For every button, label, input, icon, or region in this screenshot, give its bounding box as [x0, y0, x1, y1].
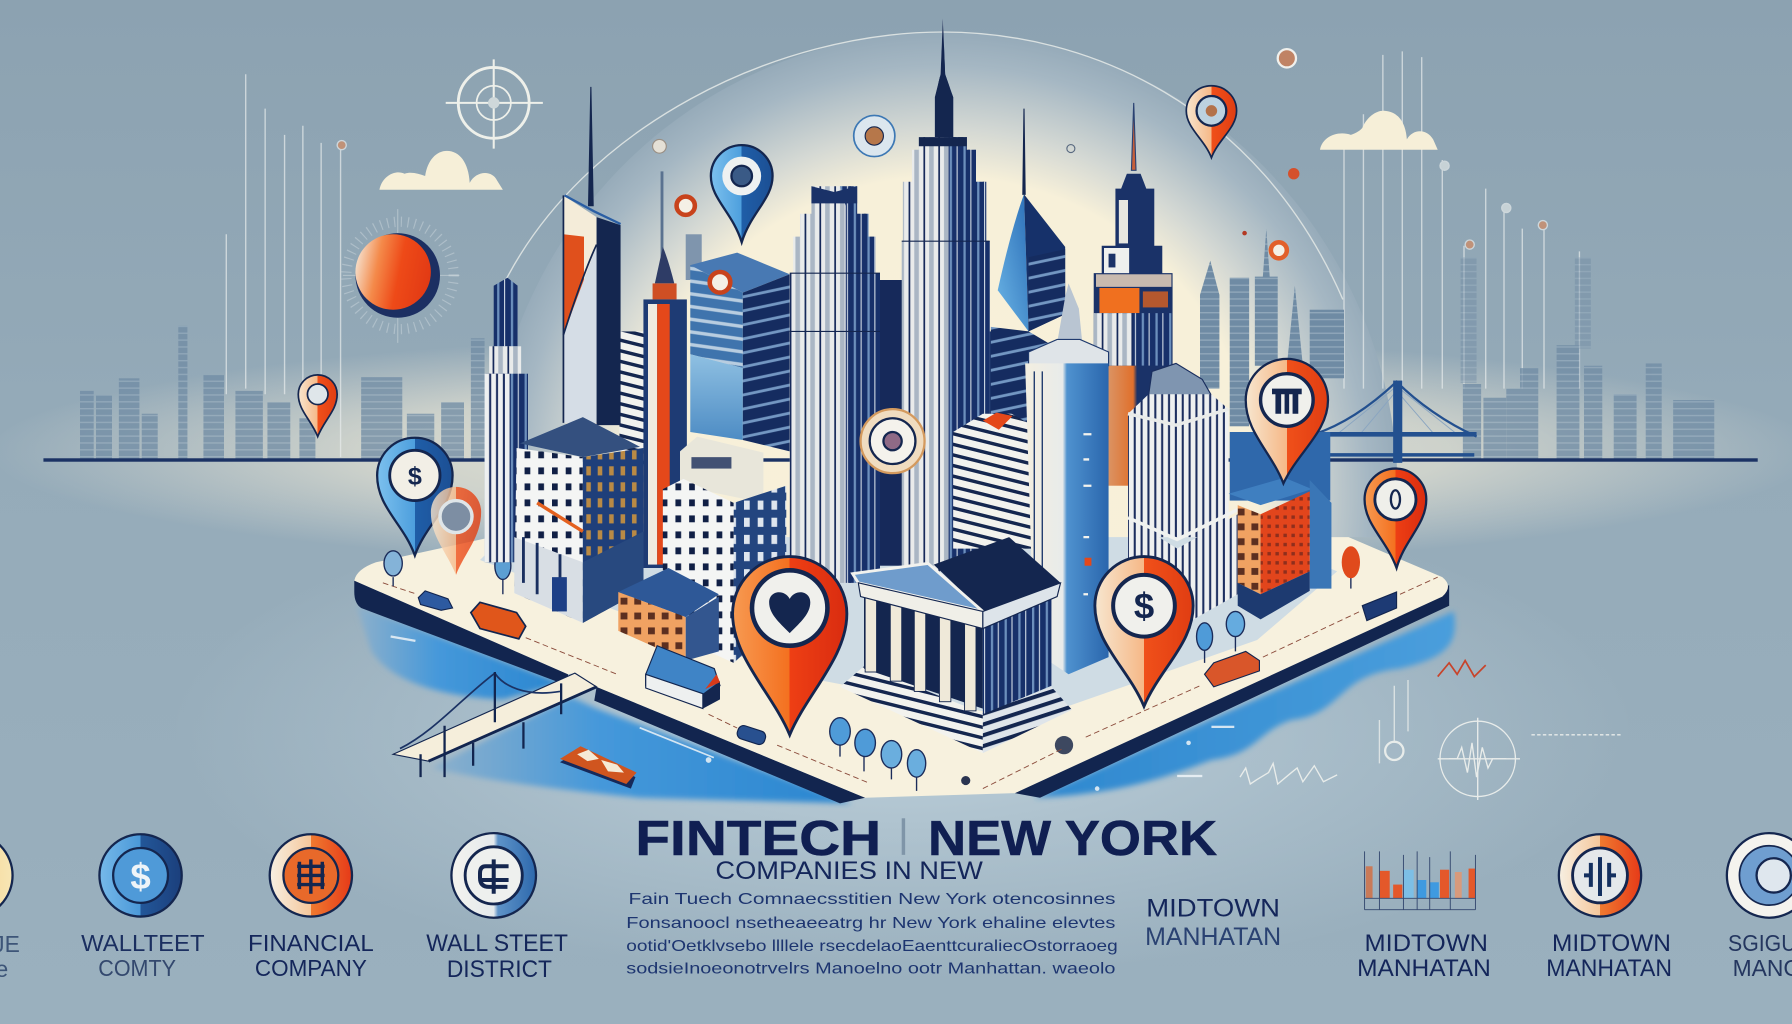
small blue house: [646, 646, 720, 709]
pier and left bridge: [393, 672, 597, 777]
tower: central spire: [902, 18, 990, 571]
label: midtown manhattan 1: [1357, 930, 1491, 982]
horizon line: [43, 458, 1758, 462]
pin: dollar: [1095, 557, 1193, 706]
tower: slim left: [485, 278, 528, 562]
midtown label centre: MANHATAN: [1145, 923, 1281, 951]
haze band at horizon: [0, 331, 1792, 983]
label: wall street district: [426, 930, 568, 983]
icon: wall street district: [451, 833, 536, 918]
pin: right small: [1365, 469, 1426, 568]
building: white grid front: [663, 437, 786, 663]
cars: [418, 591, 1397, 785]
label: partial left: [0, 931, 20, 982]
paragraph: ootid'Oetklvsebo llllele rsecdelaoEaenttcuraliecOstorraoeg: [626, 938, 1118, 955]
pin: faded behind: [431, 487, 481, 575]
cloud left: [379, 151, 503, 190]
label: financial company: [248, 930, 374, 981]
subtitle: COMPANIES IN NEW: [715, 857, 983, 885]
midtown label centre: [1145, 895, 1281, 951]
label: financial company: COMPANY: [255, 955, 367, 981]
pin: small orange left: [298, 375, 337, 437]
label: partial right: [1728, 930, 1792, 981]
paragraph: sodsieInoeonotrvelrs Manoelno ootr Manhattan. waeolo: [626, 961, 1116, 978]
tower: blue tall: [1025, 283, 1109, 674]
label: midtown manhattan 2: [1546, 930, 1672, 982]
distant skyline right: [1461, 257, 1714, 459]
temple: [840, 537, 1072, 753]
pin: heart: [733, 557, 847, 735]
label: wallteet comty: COMTY: [98, 955, 176, 981]
eye badge centre: [861, 409, 925, 473]
water glints: [390, 635, 1347, 791]
pin: blue dollar: [377, 438, 453, 555]
label: midtown manhattan 1: MANHATAN: [1357, 955, 1491, 982]
platform slab: [354, 581, 1449, 803]
label: financial company: FINANCIAL: [248, 930, 374, 956]
building: striped white: [953, 413, 1032, 549]
label: wall street district: DISTRICT: [447, 956, 552, 983]
water left: [357, 606, 851, 803]
icon: wall street dollar: $: [130, 856, 151, 897]
pin: blue upper: [711, 145, 773, 242]
icon: financial company: [270, 834, 352, 917]
boat: [560, 746, 637, 789]
label: wallteet comty: [81, 930, 205, 981]
label: wall street district: WALL STEET: [426, 930, 568, 957]
icon: partial left: [0, 833, 13, 918]
pin: orange upper right: [1186, 86, 1237, 158]
dome glow behind skyline: [506, 31, 1397, 537]
label: midtown manhattan 2: MANHATAN: [1546, 955, 1672, 982]
building: classical grid left: [514, 417, 643, 623]
bridge right: [1314, 381, 1477, 463]
label: wallteet comty: WALLTEET: [81, 930, 205, 956]
block: glass lower: [690, 354, 790, 451]
shadow ground under buildings: [480, 537, 1337, 720]
pin: building: [1246, 359, 1328, 483]
icon: partial right: [1727, 833, 1792, 918]
paragraph: [626, 891, 1118, 978]
icon: wall street dollar: [99, 834, 182, 917]
tower: angled with spire: [563, 87, 621, 430]
back gap fill dark buildings: [619, 234, 1029, 566]
label: midtown manhattan 2: MIDTOWN: [1552, 930, 1671, 957]
title: FINTECH: [635, 812, 881, 866]
ring markers: [653, 49, 1299, 293]
road dashes: [383, 577, 1438, 789]
title: NEW YORK: [928, 812, 1218, 866]
target crosshair top: [446, 59, 543, 149]
cloud right: [1320, 111, 1438, 150]
tower: red with cone: [643, 171, 687, 568]
vertical data lines left: [226, 74, 346, 457]
label: midtown manhattan 1: MIDTOWN: [1365, 930, 1488, 957]
building: small orange: [618, 568, 719, 661]
vertical data lines right: [1344, 51, 1579, 389]
icon: midtown: [1559, 834, 1641, 917]
lower right decorations: [1240, 661, 1623, 800]
trees: [384, 546, 1360, 791]
paragraph: Fain Tuech Comnaecsstitien New York otencosinnes: [629, 891, 1115, 908]
pin: dollar: $: [1134, 585, 1154, 626]
paragraph: Fonsanoocl nsetheaeeatrg hr New York ehaline elevtes: [626, 915, 1115, 932]
distant towers mid right: [1200, 229, 1344, 426]
tower: blue prism: [991, 109, 1065, 423]
building: right stepped striped: [1128, 363, 1238, 629]
building: right orange windows: [1229, 432, 1331, 619]
platform deck: [354, 537, 1448, 798]
tower: stepped left-centre: [790, 186, 880, 583]
distant skyline left: [80, 326, 485, 459]
water right: [1034, 611, 1455, 798]
tower: clock: [1094, 103, 1173, 486]
midtown label centre: MIDTOWN: [1146, 895, 1280, 923]
orb with rays: [343, 209, 459, 343]
block: striped upper: [690, 253, 790, 377]
bar chart icon: [1365, 851, 1475, 910]
pin: blue dollar: $: [408, 463, 422, 491]
title: [635, 812, 1218, 866]
